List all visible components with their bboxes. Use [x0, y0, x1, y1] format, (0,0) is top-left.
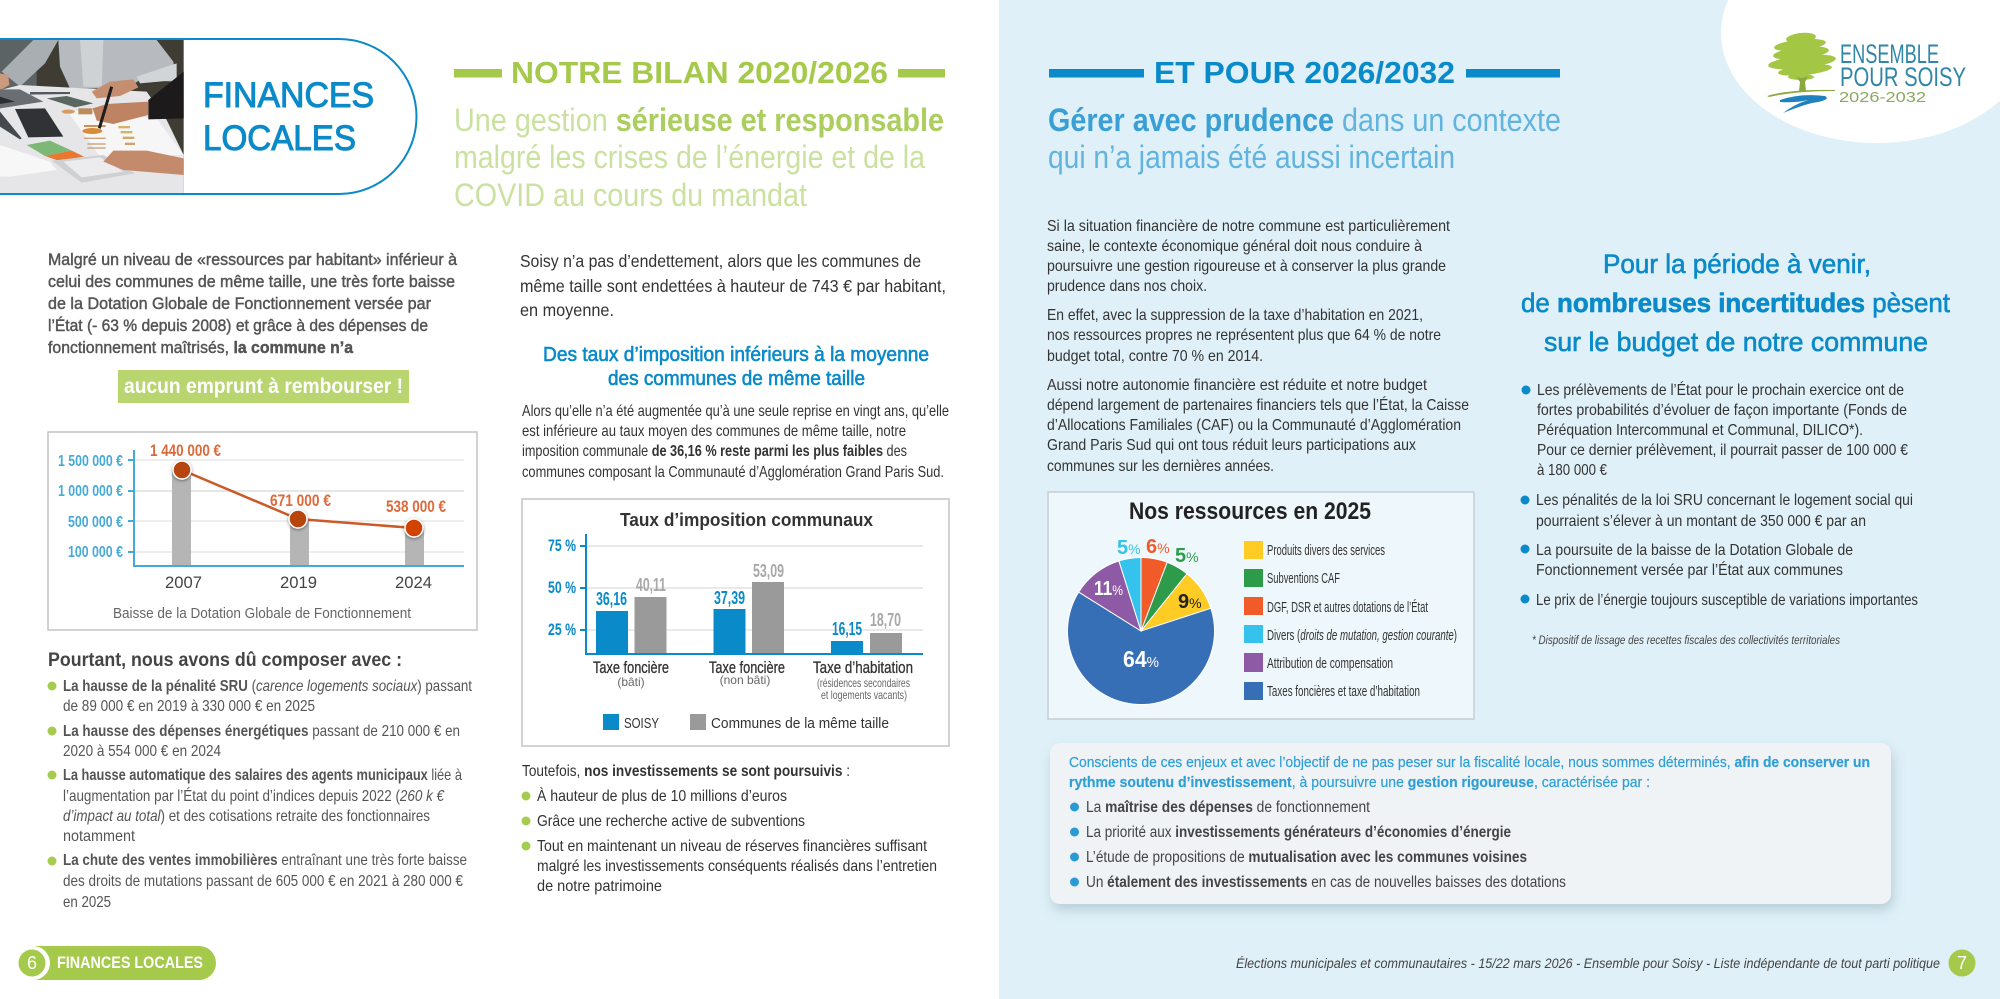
axis labels: 50 % [548, 578, 576, 597]
legend: Attribution de compensation [1267, 655, 1393, 672]
text block: ressources par habitant [48, 251, 458, 357]
logo wordmark: 2026-2032 [1839, 89, 1926, 106]
value labels: 1 440 000 € [150, 441, 221, 460]
category labels: Taxe foncière [709, 658, 785, 677]
category labels: (bâti) [617, 675, 645, 689]
text block: imposition: est inférieure au taux moyen des communes de même taille, notre [522, 423, 906, 440]
list: incertitudes: La poursuite de la baisse de la Dotation Globale de [1536, 542, 1853, 559]
logo: ensemble pour soisy [1721, 0, 2000, 143]
text block: contexte économique: communes sur les dernières années. [1047, 458, 1274, 475]
axis labels: 25 % [548, 620, 576, 639]
icon: tree and river [1767, 31, 1836, 113]
value labels: 538 000 € [386, 497, 446, 516]
category labels: Taxe foncière [593, 658, 669, 677]
axis labels [58, 453, 123, 561]
chart: taux d'imposition communaux: Taux d’imposition communaux [620, 510, 873, 530]
list: contraintes: La chute des ventes immobilières entraînant une très forte baisse [63, 852, 467, 869]
list: incertitudes: fortes probabilités d’évoluer de façon importante (Fonds de [1537, 402, 1907, 419]
text block: contexte économique: Aussi notre autonomie financière est réduite et notre budget [1047, 377, 1427, 394]
text block: contexte économique: nos ressources propres ne représentent plus que 64 % de notre [1047, 327, 1441, 344]
text block: ressources par habitant: de la Dotation Globale de Fonctionnement versée par [48, 295, 431, 313]
category labels: et logements vacants) [821, 688, 907, 702]
list: contraintes: notamment [63, 828, 135, 845]
subheading: gestion sérieuse [454, 102, 944, 213]
text block: ressources par habitant: Malgré un niveau de «ressources par habitant» inférieur à [48, 251, 458, 269]
heading: pourtant: Pourtant, nous avons dû composer avec : [48, 650, 402, 671]
footer: page 7 [1948, 950, 1976, 976]
subheading: gestion sérieuse: COVID au cours du mandat [454, 177, 807, 213]
legend [603, 714, 889, 732]
text block: contexte économique: Si la situation financière de notre commune est particulièrement [1047, 218, 1450, 235]
panel intro: Conscients de ces enjeux et avec l’objectif de ne pas peser sur la fiscalité locale, nous sommes déterminés, afin de conserver un [1069, 754, 1870, 771]
axes [128, 450, 464, 566]
list: contraintes: de 89 000 € en 2019 à 330 000 € en 2025 [63, 698, 315, 715]
legend: Produits divers des services [1267, 542, 1385, 559]
text block: contexte économique: prudence dans nos choix. [1047, 278, 1207, 295]
legend: Subventions CAF [1267, 570, 1340, 587]
value labels: 36,16 [596, 589, 627, 609]
panel intro [1069, 754, 1870, 791]
text block: contexte économique: Grand Paris Sud qui ont tous réduit leurs participations aux [1047, 437, 1416, 454]
photo: hands working on financial documents [0, 40, 184, 193]
bars [596, 582, 902, 654]
text block: ressources par habitant: l’État (- 63 % depuis 2008) et grâce à des dépenses de [48, 316, 428, 335]
heading: taux d'imposition: des communes de même taille [608, 368, 865, 390]
footnote: * Dispositif de lissage des recettes fiscales des collectivités territoriales [1532, 633, 1840, 647]
list: contraintes: La hausse automatique des salaires des agents municipaux liée à [63, 767, 462, 784]
heading: et pour 2026/2032 [1049, 55, 1560, 90]
text block: investissements: de notre patrimoine [537, 878, 662, 895]
text block: imposition [522, 403, 949, 481]
list: contraintes [48, 678, 472, 911]
trend line [173, 461, 423, 537]
chart: nos ressources en 2025 [1048, 492, 1474, 719]
callout: aucun emprunt: aucun emprunt à rembourser ! [124, 375, 403, 398]
footer tab: page 6: FINANCES LOCALES [57, 954, 203, 972]
category labels [593, 658, 913, 702]
heading: période à venir [1521, 249, 1950, 357]
panel list: La priorité aux investissements générateurs d’économies d’énergie [1086, 824, 1511, 841]
text block: contexte économique [1047, 218, 1469, 475]
banner title [203, 76, 374, 158]
chart: taux d'imposition communaux [522, 499, 949, 746]
category labels: (non bâti) [720, 673, 770, 687]
footer tab: page 6 [16, 946, 216, 980]
heading: période à venir: sur le budget de notre commune [1544, 327, 1928, 357]
legend [1244, 541, 1457, 700]
banner title: FINANCES [203, 76, 374, 115]
text block: contexte économique: d’Allocations Familiales (CAF) ou la Communauté d’Agglomération [1047, 417, 1461, 434]
subheading: gestion sérieuse: Une gestion sérieuse et responsable [454, 102, 944, 138]
list: incertitudes [1520, 380, 1918, 609]
axis labels: 75 % [548, 536, 576, 555]
section banner: finances locales [0, 39, 416, 194]
value labels: 37,39 [714, 588, 745, 608]
heading: taux d'imposition: Des taux d’imposition inférieurs à la moyenne [543, 344, 929, 366]
legend: SOISY [624, 715, 659, 732]
list: incertitudes: Péréquation Intercommunal et Communal, DILICO*). [1537, 422, 1863, 439]
text block: investissements: Toutefois, nos investissements se sont poursuivis : [522, 763, 850, 780]
text block: imposition: imposition communale de 36,16 % reste parmi les plus faibles des [522, 443, 907, 460]
heading: période à venir: Pour la période à venir, [1603, 249, 1871, 279]
list: contraintes: des droits de mutations passant de 605 000 € en 2021 à 280 000 € [63, 873, 463, 890]
panel list: La maîtrise des dépenses de fonctionnement [1086, 799, 1371, 816]
years: 2024 [395, 573, 432, 592]
list: contraintes: 2020 à 554 000 € en 2024 [63, 743, 221, 760]
right page background [999, 0, 2000, 999]
category labels: Taxe d’habitation [813, 658, 913, 677]
text block: investissements: Grâce une recherche active de subventions [537, 813, 805, 830]
text block: endettement: en moyenne. [520, 300, 614, 320]
text block: contexte économique: poursuivre une gestion rigoureuse et à conserver la plus grande [1047, 258, 1446, 275]
text block: imposition: communes composant la Communauté d’Agglomération Grand Paris Sud. [522, 464, 944, 481]
left page background [0, 0, 999, 999]
subheading: gestion sérieuse: malgré les crises de l’énergie et de la [454, 139, 925, 175]
axes [580, 534, 923, 654]
axis labels: 1 500 000 € [58, 453, 123, 470]
pie labels: 5% [1117, 537, 1141, 559]
years [165, 573, 432, 592]
value labels: 16,15 [832, 619, 862, 639]
text block: investissements: malgré les investissements conséquents réalisés dans l’entretien [537, 858, 937, 875]
text block: contexte économique: saine, le contexte économique général doit nous conduire à [1047, 238, 1422, 255]
banner title: LOCALES [203, 119, 356, 158]
heading: taux d'imposition [543, 344, 929, 390]
text block: investissements [522, 763, 937, 895]
panel list: L’étude de propositions de mutualisation avec les communes voisines [1086, 849, 1527, 866]
text block: endettement: Soisy n’a pas d’endettement, alors que les communes de [520, 251, 921, 271]
axis labels: 500 000 € [68, 514, 123, 531]
value labels: 40,11 [636, 575, 666, 595]
list: incertitudes: à 180 000 € [1537, 462, 1607, 479]
pie labels: 11% [1094, 578, 1123, 600]
legend: Communes de la même taille [711, 715, 889, 732]
pie labels [1094, 536, 1202, 672]
pie labels: 6% [1146, 536, 1170, 558]
text block: imposition: Alors qu’elle n’a été augmentée qu’à une seule reprise en vingt ans, qu’elle [522, 403, 949, 420]
category labels: (résidences secondaires [817, 676, 910, 690]
pie labels: 9% [1178, 591, 1202, 613]
value labels [150, 441, 446, 516]
panel list: Un étalement des investissements en cas de nouvelles baisses des dotations [1086, 874, 1566, 891]
legend: DGF, DSR et autres dotations de l’État [1267, 599, 1429, 616]
list: incertitudes: Le prix de l’énergie toujours susceptible de variations importantes [1536, 592, 1918, 609]
chart: nos ressources en 2025: Nos ressources en 2025 [1129, 498, 1371, 525]
heading: et pour 2026/2032: ET POUR 2026/2032 [1154, 55, 1455, 90]
subheading: gérer avec prudence [1048, 102, 1561, 175]
list: contraintes: l’augmentation par l’État du point d’indices depuis 2022 (260 k € [63, 786, 445, 805]
list: incertitudes: Les pénalités de la loi SRU concernant le logement social qui [1536, 492, 1913, 509]
years: 2019 [280, 573, 317, 592]
text block: contexte économique: dépend largement de partenaires financiers tels que l’État, la Caisse [1047, 395, 1469, 414]
logo wordmark [1839, 39, 1966, 106]
list: contraintes: La hausse des dépenses énergétiques passant de 210 000 € en [63, 723, 460, 740]
list: contraintes: en 2025 [63, 894, 111, 911]
text block: investissements: Tout en maintenant un niveau de réserves financières suffisant [537, 838, 927, 855]
axis labels [548, 536, 576, 639]
years: 2007 [165, 573, 202, 592]
axis labels: 1 000 000 € [58, 483, 123, 500]
callout: aucun emprunt [118, 370, 409, 403]
value labels: 18,70 [870, 610, 901, 630]
list: incertitudes: Fonctionnement versée par l’État aux communes [1536, 560, 1843, 579]
panel list [1070, 799, 1566, 891]
legend: Taxes foncières et taxe d’habitation [1267, 683, 1420, 700]
list: contraintes: La hausse de la pénalité SRU (carence logements sociaux) passant [63, 678, 472, 695]
pie [1068, 557, 1215, 705]
list: contraintes: d’impact au total) et des cotisations retraite des fonctionnaires [63, 808, 430, 825]
pie labels: 64% [1123, 646, 1159, 672]
legend: Divers (droits de mutation, gestion courante) [1267, 627, 1457, 644]
footer: page 7: 7 [1957, 953, 1967, 973]
panel intro: rythme soutenu d’investissement, à poursuivre une gestion rigoureuse, caractérisée par : [1069, 774, 1650, 791]
chart: baisse de la dotation [48, 432, 477, 630]
text block: ressources par habitant: celui des communes de même taille, une très forte baisse [48, 273, 455, 291]
value labels: 53,09 [753, 561, 784, 581]
bars [172, 470, 424, 566]
panel: gestion rigoureuse [1050, 743, 1891, 904]
subheading: gérer avec prudence: Gérer avec prudence dans un contexte [1048, 102, 1561, 138]
text block: endettement: même taille sont endettées à hauteur de 743 € par habitant, [520, 276, 946, 296]
list: incertitudes: pourraient s’élever à un montant de 350 000 € par an [1536, 513, 1866, 530]
text block: contexte économique: En effet, avec la suppression de la taxe d’habitation en 2021, [1047, 307, 1423, 324]
footer: mention légale: Élections municipales et communautaires - 15/22 mars 2026 - Ensemble pour Soisy - Liste indépendante de tout parti politique [1236, 956, 1940, 971]
list: incertitudes: Pour ce dernier prélèvement, il pourrait passer de 100 000 € [1537, 442, 1908, 459]
list: incertitudes: Les prélèvements de l’État pour le prochain exercice ont de [1537, 380, 1904, 399]
text block: ressources par habitant: fonctionnement maîtrisés, la commune n’a [48, 339, 354, 357]
chart caption: Baisse de la Dotation Globale de Fonctionnement [113, 606, 411, 622]
text block: investissements: À hauteur de plus de 10 millions d’euros [537, 786, 787, 805]
pie labels: 5% [1175, 545, 1199, 567]
subheading: gérer avec prudence: qui n’a jamais été aussi incertain [1048, 139, 1455, 175]
axis labels: 100 000 € [68, 544, 123, 561]
text block: contexte économique: budget total, contre 70 % en 2014. [1047, 348, 1263, 365]
logo wordmark: ENSEMBLE [1840, 39, 1939, 69]
heading: période à venir: de nombreuses incertitudes pèsent [1521, 288, 1950, 318]
footer tab: page 6: 6 [27, 953, 37, 973]
text block: endettement [520, 251, 946, 320]
value labels: 671 000 € [270, 491, 331, 510]
value labels [596, 561, 901, 639]
heading: notre bilan: NOTRE BILAN 2020/2026 [511, 55, 888, 90]
